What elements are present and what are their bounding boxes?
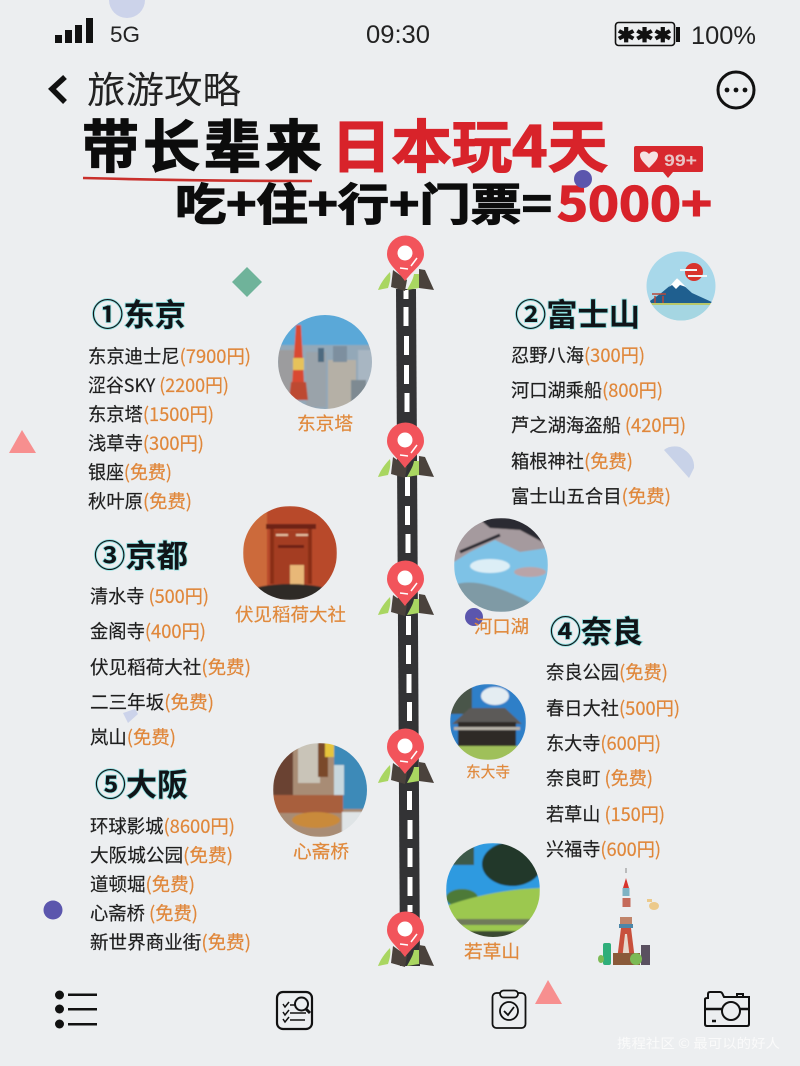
panel: Kyoto xyxy=(90,531,251,750)
list: Nara spots: 奈良公园(免费) xyxy=(546,659,668,685)
photo: Tokyo Tower xyxy=(278,315,372,432)
icon: heart xyxy=(640,151,658,168)
list: Kyoto spots: 金阁寺(400円) xyxy=(90,618,206,644)
icon: Tokyo Tower illustration xyxy=(598,868,659,965)
decorative shape: pink triangle bottom xyxy=(535,980,562,1004)
caption: 伏见稻荷大社 xyxy=(235,601,346,627)
list: Tokyo spots xyxy=(88,343,251,514)
status bar xyxy=(55,18,756,50)
decorative shape: purple dot xyxy=(465,608,483,626)
map pin 1 xyxy=(378,236,434,291)
caption: 河口湖 xyxy=(474,613,529,639)
map pin 2 xyxy=(378,422,434,478)
list: Nara spots: 春日大社(500円) xyxy=(546,695,680,721)
icon: list xyxy=(55,990,97,1028)
icon: signal bars xyxy=(55,18,93,43)
decorative shape: pink triangle left xyxy=(9,430,36,453)
list: Kyoto spots: 二三年坂(免费) xyxy=(90,689,214,715)
photo: Todaiji xyxy=(450,684,526,782)
icon: back chevron xyxy=(52,77,65,102)
list: Fuji spots: 箱根神社(免费) xyxy=(511,448,633,474)
decorative shape: lilac circle top xyxy=(109,0,145,18)
decorative shape: green diamond xyxy=(232,267,262,297)
heading: Nara: ④奈良 xyxy=(550,607,643,652)
list: Tokyo spots: 涩谷SKY (2200円) xyxy=(88,372,229,398)
decorative shape: lilac mark left xyxy=(123,709,138,723)
list: Fuji spots xyxy=(511,342,686,509)
list: Nara spots xyxy=(546,659,680,862)
list: Osaka spots: 大阪城公园(免费) xyxy=(90,842,233,868)
list: Fuji spots: 富士山五合目(免费) xyxy=(511,483,671,509)
list: Osaka spots: 心斋桥 (免费) xyxy=(90,900,198,926)
heading: Osaka: ⑤大阪 xyxy=(95,760,188,805)
list: Kyoto spots: 伏见稻荷大社(免费) xyxy=(90,654,251,680)
heading: Tokyo: ①东京 xyxy=(92,290,186,335)
heading: Mt Fuji: ②富士山 xyxy=(515,290,640,335)
icon: battery: ✱✱✱ xyxy=(617,19,672,48)
icon: Mt Fuji badge xyxy=(645,250,717,322)
photo: Wakakusayama xyxy=(446,842,542,964)
list: Kyoto spots: 清水寺 (500円) xyxy=(90,583,209,609)
list: Fuji spots: 忍野八海(300円) xyxy=(511,342,645,368)
caption: 东大寺 xyxy=(466,761,510,782)
subtitle black part: 吃+住+行+门票= xyxy=(175,169,552,233)
battery percent: 100% xyxy=(691,22,756,50)
photo: Shinsaibashi xyxy=(273,743,368,864)
list: Tokyo spots: 秋叶原(免费) xyxy=(88,488,192,514)
page title: 旅游攻略 xyxy=(87,60,241,114)
list: Kyoto spots: 岚山(免费) xyxy=(90,724,176,750)
road dashes xyxy=(404,290,412,912)
list: Nara spots: 奈良町 (免费) xyxy=(546,765,653,791)
road timeline xyxy=(378,236,434,967)
list: Kyoto spots xyxy=(90,583,251,750)
main title xyxy=(82,102,608,184)
map pin 4 xyxy=(378,728,434,784)
icon: more menu xyxy=(718,72,754,108)
subtitle xyxy=(175,166,712,235)
decorative shape: purple dot left xyxy=(44,900,62,920)
clock: 09:30 xyxy=(366,21,430,49)
list: Nara spots: 若草山 (150円) xyxy=(546,801,665,827)
panel: Mt Fuji xyxy=(511,290,686,509)
list: Nara spots: 兴福寺(600円) xyxy=(546,836,661,862)
title underline xyxy=(83,178,312,181)
title black part: 带长辈来 xyxy=(82,102,322,184)
icon: camera xyxy=(705,992,749,1026)
list: Fuji spots: 河口湖乘船(800円) xyxy=(511,377,663,403)
list: Tokyo spots: 浅草寺(300円) xyxy=(88,430,204,456)
photo: Lake Kawaguchi xyxy=(454,518,548,639)
list: Tokyo spots: 东京迪士尼(7900円) xyxy=(88,343,251,369)
decorative shape: purple dot title xyxy=(574,170,592,188)
subtitle red price: 5000+ xyxy=(557,166,712,235)
icon: clipboard check xyxy=(492,990,526,1028)
list: Fuji spots: 芦之湖海盗船 (420円) xyxy=(511,412,686,438)
photo: Fushimi Inari xyxy=(235,506,346,627)
title red part: 日本玩4天 xyxy=(331,102,608,184)
badge count: 99+ xyxy=(664,151,697,170)
map pin 3 xyxy=(378,560,434,616)
caption: 心斋桥 xyxy=(293,838,349,864)
caption: 东京塔 xyxy=(297,410,353,436)
heading: Kyoto: ③京都 xyxy=(94,531,188,576)
watermark: 携程社区 © 最可以的好人 xyxy=(617,1033,780,1052)
panel: Nara xyxy=(546,607,680,862)
map pin 5 xyxy=(378,912,434,967)
panel: Tokyo xyxy=(88,290,251,514)
list: Osaka spots: 道顿堀(免费) xyxy=(90,871,195,897)
road surface xyxy=(396,289,420,966)
list: Osaka spots: 环球影城(8600円) xyxy=(90,813,235,839)
decorative shape: lilac half disc right xyxy=(664,446,694,478)
list: Osaka spots xyxy=(90,813,251,955)
list: Nara spots: 东大寺(600円) xyxy=(546,730,661,756)
caption: 若草山 xyxy=(464,938,520,964)
list: Tokyo spots: 东京塔(1500円) xyxy=(88,401,214,427)
list: Tokyo spots: 银座(免费) xyxy=(88,459,172,485)
icon: checklist search xyxy=(277,992,312,1029)
nav bar xyxy=(52,60,754,114)
list: Osaka spots: 新世界商业街(免费) xyxy=(90,929,251,955)
bottom toolbar xyxy=(55,990,749,1029)
network label: 5G xyxy=(110,22,140,47)
panel: Osaka xyxy=(90,760,251,955)
like badge xyxy=(634,146,703,178)
